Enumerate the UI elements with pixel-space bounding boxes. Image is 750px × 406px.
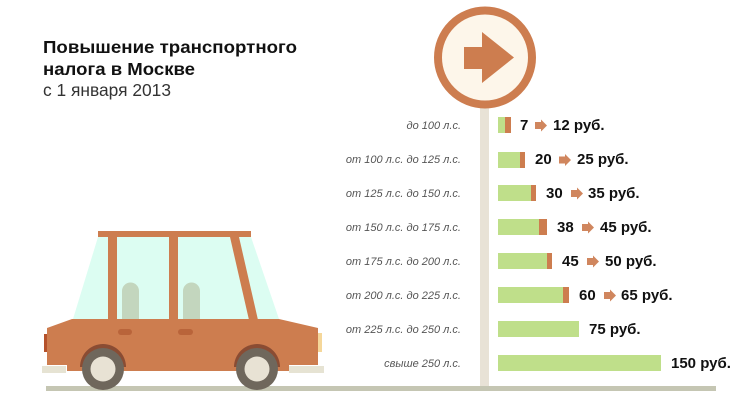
car lights: [44, 333, 322, 352]
power range labels: от 150 л.с. до 175 л.с.: [346, 222, 461, 234]
bar row: 225-250 hp: 75 руб.: [589, 321, 641, 338]
bar row: 100-125 hp: [498, 151, 629, 168]
power range labels: [346, 120, 461, 370]
bar row: over 250 hp: [498, 355, 731, 372]
bar row: 175-200 hp: 45: [562, 253, 579, 270]
power range labels: от 200 л.с. до 225 л.с.: [346, 290, 461, 302]
bar row: up to 100 hp: 7: [520, 117, 528, 134]
bar row: 200-225 hp: 65 руб.: [621, 287, 673, 304]
bar row: 125-150 hp: [498, 185, 640, 202]
icon: car: [42, 231, 324, 390]
bar row: 200-225 hp: [498, 287, 673, 304]
bar row: 150-175 hp: 38: [557, 219, 574, 236]
bar row: 200-225 hp: 60: [579, 287, 596, 304]
power range labels: от 100 л.с. до 125 л.с.: [346, 154, 461, 166]
ground line: [46, 386, 716, 391]
bar row: 150-175 hp: [498, 219, 652, 236]
bar row: up to 100 hp: 12 руб.: [553, 117, 605, 134]
bar row: 100-125 hp: 20: [535, 151, 552, 168]
bar row: 225-250 hp: [498, 321, 641, 338]
power range labels: от 125 л.с. до 150 л.с.: [346, 188, 461, 200]
car door handles: [118, 329, 193, 335]
bar row: 175-200 hp: [498, 253, 657, 270]
power range labels: от 175 л.с. до 200 л.с.: [346, 256, 461, 268]
title block: с 1 января 2013: [43, 80, 171, 100]
power range labels: до 100 л.с.: [407, 120, 461, 132]
bar row: 175-200 hp: 50 руб.: [605, 253, 657, 270]
bar row: 150-175 hp: 45 руб.: [600, 219, 652, 236]
icon: road sign with arrow: [438, 10, 532, 104]
car seats: [122, 282, 200, 320]
bar row: over 250 hp: 150 руб.: [671, 355, 731, 372]
power range labels: от 225 л.с. до 250 л.с.: [346, 324, 461, 336]
title block: налога в Москве: [43, 59, 195, 79]
car roof and pillars: [98, 231, 258, 320]
power range labels: свыше 250 л.с.: [384, 358, 461, 370]
bar row: 125-150 hp: 30: [546, 185, 563, 202]
bar row: 125-150 hp: 35 руб.: [588, 185, 640, 202]
car bumpers: [42, 366, 324, 373]
pole: [480, 100, 489, 388]
bar row: 100-125 hp: 25 руб.: [577, 151, 629, 168]
car glass: [73, 237, 279, 319]
car body: [47, 319, 318, 371]
front and rear wheels: [80, 344, 280, 390]
bar row: up to 100 hp: [498, 117, 605, 134]
title block: Повышение транспортного: [43, 37, 297, 57]
title block: [43, 37, 297, 100]
